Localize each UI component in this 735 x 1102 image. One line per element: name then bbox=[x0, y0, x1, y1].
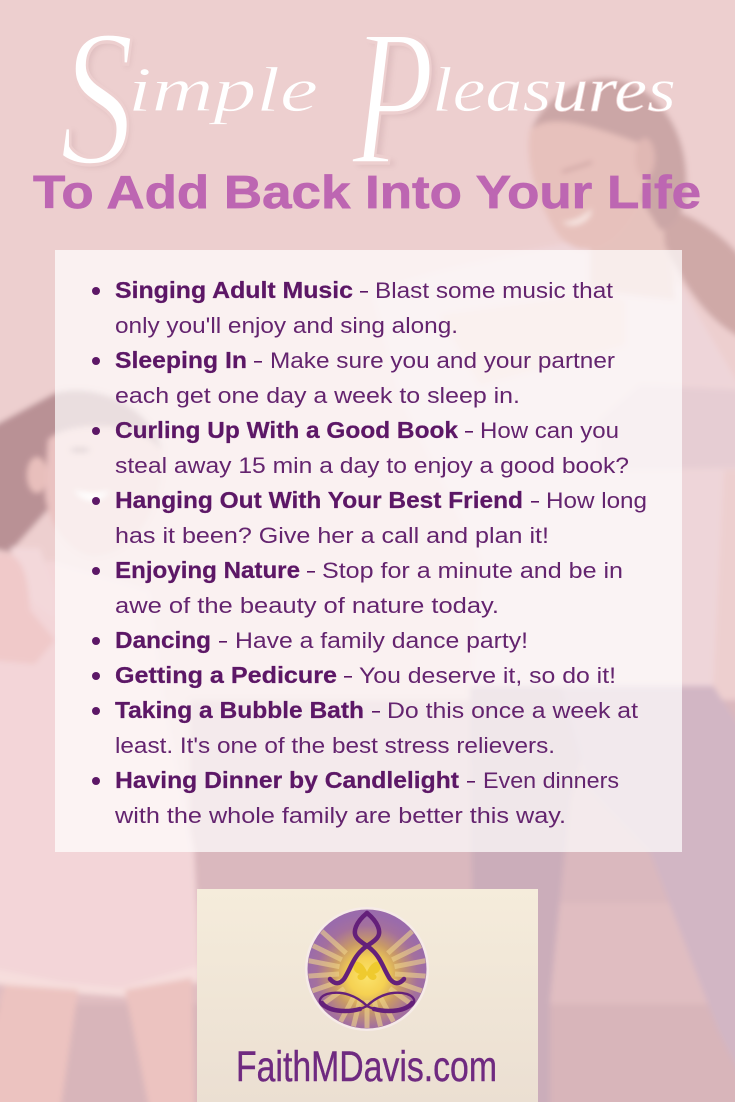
item: taking a bubble bath: Do this once a week at bbox=[387, 698, 639, 723]
sofa back bbox=[190, 700, 735, 910]
floor bbox=[0, 1004, 735, 1102]
panel background bbox=[55, 250, 682, 852]
panel: logo and website bbox=[197, 889, 538, 1102]
woman ear bbox=[635, 138, 655, 178]
item: sleeping in bbox=[92, 347, 616, 408]
item: taking a bubble bath: Taking a Bubble Bath bbox=[115, 697, 364, 723]
item: getting a pedicure bbox=[92, 662, 616, 688]
girl face bbox=[45, 426, 162, 556]
girl arm bbox=[0, 553, 55, 664]
item: taking a bubble bath: least. It's one of the best stress relievers. bbox=[115, 733, 555, 758]
item: hanging out with your best friend bbox=[92, 487, 647, 548]
butterfly bbox=[353, 961, 381, 980]
item: singing adult music: only you'll enjoy and sing along. bbox=[115, 313, 458, 338]
item: dancing bbox=[92, 627, 528, 653]
panel: list of simple pleasures bbox=[55, 250, 682, 852]
woman neck bbox=[590, 195, 675, 300]
figure bbox=[320, 913, 414, 1011]
woman smile bbox=[562, 208, 592, 225]
woman shirt bbox=[370, 235, 735, 686]
item: having dinner by candlelight: Even dinners bbox=[483, 768, 619, 793]
item: dancing: Have a family dance party! bbox=[235, 628, 528, 653]
item: singing adult music bbox=[92, 277, 614, 338]
website: FaithMDavis.com bbox=[236, 1043, 497, 1091]
woman left leg bbox=[470, 684, 600, 1102]
item: singing adult music: Blast some music that bbox=[375, 278, 614, 303]
item: enjoying nature: Stop for a minute and be in bbox=[322, 558, 623, 583]
girl lace hem bbox=[0, 965, 200, 997]
item: sleeping in: each get one day a week to sleep in. bbox=[115, 383, 520, 408]
girl legs bbox=[0, 978, 195, 1102]
woman face bbox=[529, 121, 647, 249]
item: hanging out with your best friend: How long bbox=[546, 488, 647, 513]
item: having dinner by candlelight: Having Dinner by Candlelight bbox=[115, 767, 459, 793]
item: singing adult music: Singing Adult Music bbox=[115, 277, 353, 303]
woman sleeve bbox=[600, 385, 735, 470]
heading: Simple Pleasures bbox=[60, 0, 676, 209]
item: having dinner by candlelight bbox=[92, 767, 619, 828]
item: getting a pedicure: You deserve it, so do it! bbox=[359, 663, 616, 688]
girl hair bbox=[0, 390, 162, 552]
logo panel background bbox=[197, 889, 538, 1102]
subheading: To Add Back Into Your Life bbox=[33, 166, 701, 218]
girl shoulder strap bbox=[10, 547, 55, 620]
woman ponytail bbox=[662, 205, 735, 340]
item: taking a bubble bath bbox=[92, 697, 639, 758]
logo rays bbox=[308, 930, 426, 1028]
item: sleeping in: Sleeping In bbox=[115, 347, 247, 373]
girl dress bbox=[0, 560, 200, 990]
item: sleeping in: Make sure you and your partner bbox=[270, 348, 616, 373]
heading: Simple Pleasures: leasures bbox=[432, 54, 676, 125]
item: having dinner by candlelight: with the whole family are better this way. bbox=[114, 803, 566, 828]
woman right leg bbox=[560, 684, 735, 1085]
woman eye bbox=[562, 162, 592, 172]
logo disc bbox=[305, 907, 429, 1031]
item: hanging out with your best friend: Hanging Out With Your Best Friend bbox=[115, 487, 523, 513]
woman hair bbox=[530, 78, 686, 230]
item: enjoying nature: awe of the beauty of nature today. bbox=[115, 593, 499, 618]
item: enjoying nature bbox=[92, 557, 623, 618]
girl eye bbox=[70, 447, 90, 453]
woman arm bbox=[440, 295, 625, 385]
girl ear bbox=[27, 457, 47, 493]
item: hanging out with your best friend: has it been? Give her a call and plan it! bbox=[115, 523, 549, 548]
item: curling up with a good book: How can you bbox=[480, 418, 619, 443]
item: curling up with a good book: steal away 15 min a day to enjoy a good book? bbox=[115, 453, 629, 478]
item: dancing: Dancing bbox=[115, 627, 211, 653]
item: enjoying nature: Enjoying Nature bbox=[115, 557, 300, 583]
sofa seat bbox=[0, 903, 735, 1005]
girl smile bbox=[74, 490, 110, 500]
item: curling up with a good book: Curling Up With a Good Book bbox=[115, 417, 458, 443]
icon: meditating figure logo bbox=[304, 907, 430, 1035]
item: curling up with a good book bbox=[92, 417, 629, 478]
item: getting a pedicure: Getting a Pedicure bbox=[115, 662, 337, 688]
heading shadow bbox=[65, 0, 438, 209]
heading: Simple Pleasures: imple bbox=[128, 54, 318, 125]
